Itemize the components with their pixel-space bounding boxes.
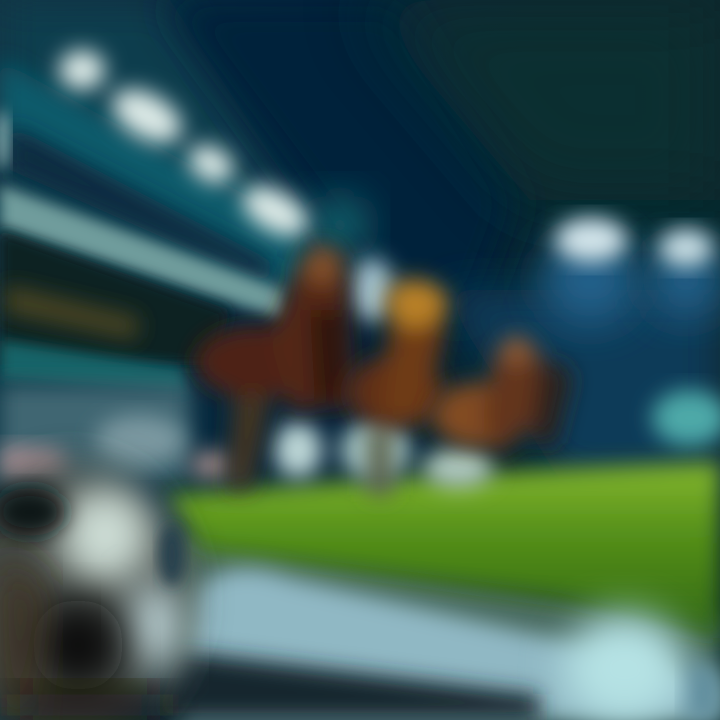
horses [195, 245, 572, 495]
horse 1 [195, 245, 352, 490]
stadium lights right [540, 218, 720, 325]
horse 2 [347, 279, 450, 495]
crowd glare behind horses [190, 258, 493, 488]
football [0, 465, 188, 720]
stadium lights left [59, 50, 316, 246]
teal glow right [652, 390, 720, 446]
pitch [165, 462, 720, 640]
white strip foreground [150, 569, 720, 720]
left grandstand [0, 60, 300, 480]
horse 3 [432, 336, 572, 455]
